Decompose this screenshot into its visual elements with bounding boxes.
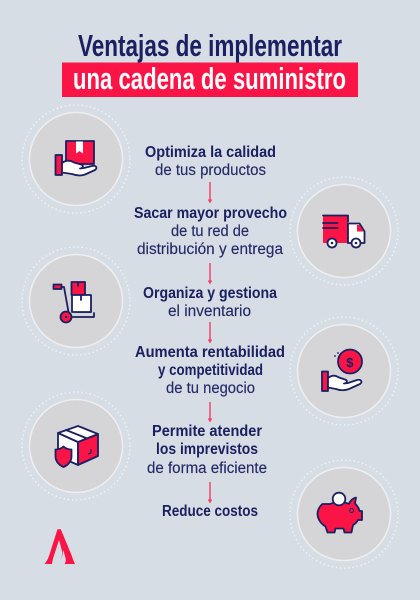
- benefit 1 text: de tus productos: [155, 162, 266, 179]
- benefit 4 text: Aumenta rentabilidad: [135, 344, 285, 361]
- arrow 4: [208, 402, 212, 421]
- benefit 4 text: de tu negocio: [166, 380, 255, 397]
- benefit 4 text: y competitividad: [158, 362, 263, 379]
- benefit 3 text: [143, 285, 277, 320]
- benefit 6 text: Reduce costos: [162, 503, 258, 520]
- benefit 1 text: [145, 144, 276, 179]
- icon: piggy bank: [318, 493, 362, 532]
- circle: protected package icon: [22, 392, 130, 500]
- benefit 2 text: [134, 205, 287, 258]
- benefit 3 text: el inventario: [168, 303, 251, 320]
- arrow 3: [208, 322, 212, 342]
- benefit 3 text: Organiza y gestiona: [143, 285, 277, 302]
- circle: profitability icon: [290, 317, 398, 425]
- arrow 2: [208, 263, 212, 283]
- benefit 2 text: distribución y entrega: [137, 241, 283, 258]
- icon: box in hand: [56, 141, 96, 176]
- logo: [44, 529, 75, 564]
- icon: hand trolley with boxes: [54, 282, 94, 322]
- arrow 5: [208, 482, 212, 502]
- circle: inventory trolley icon: [22, 247, 130, 355]
- circle: piggy bank icon: [290, 460, 398, 568]
- benefit 5 text: [147, 423, 267, 477]
- benefit 5 text: de forma eficiente: [147, 460, 267, 477]
- icon: box with shield: [56, 426, 98, 467]
- circle: quality product icon: [22, 105, 130, 213]
- benefit 4 text: [135, 344, 285, 397]
- benefit 2 text: Sacar mayor provecho: [134, 205, 287, 222]
- icon: delivery truck: [323, 216, 364, 248]
- title highlight bar: [62, 62, 358, 97]
- benefit 2 text: de tu red de: [171, 223, 249, 240]
- title: [62, 28, 358, 97]
- circle: truck icon: [290, 177, 398, 285]
- benefit 1 text: Optimiza la calidad: [145, 144, 276, 161]
- benefit 5 text: los imprevistos: [156, 441, 258, 458]
- icon: coin over hand: $: [346, 355, 354, 370]
- benefit 5 text: Permite atender: [152, 423, 262, 440]
- arrow 1: [208, 182, 212, 202]
